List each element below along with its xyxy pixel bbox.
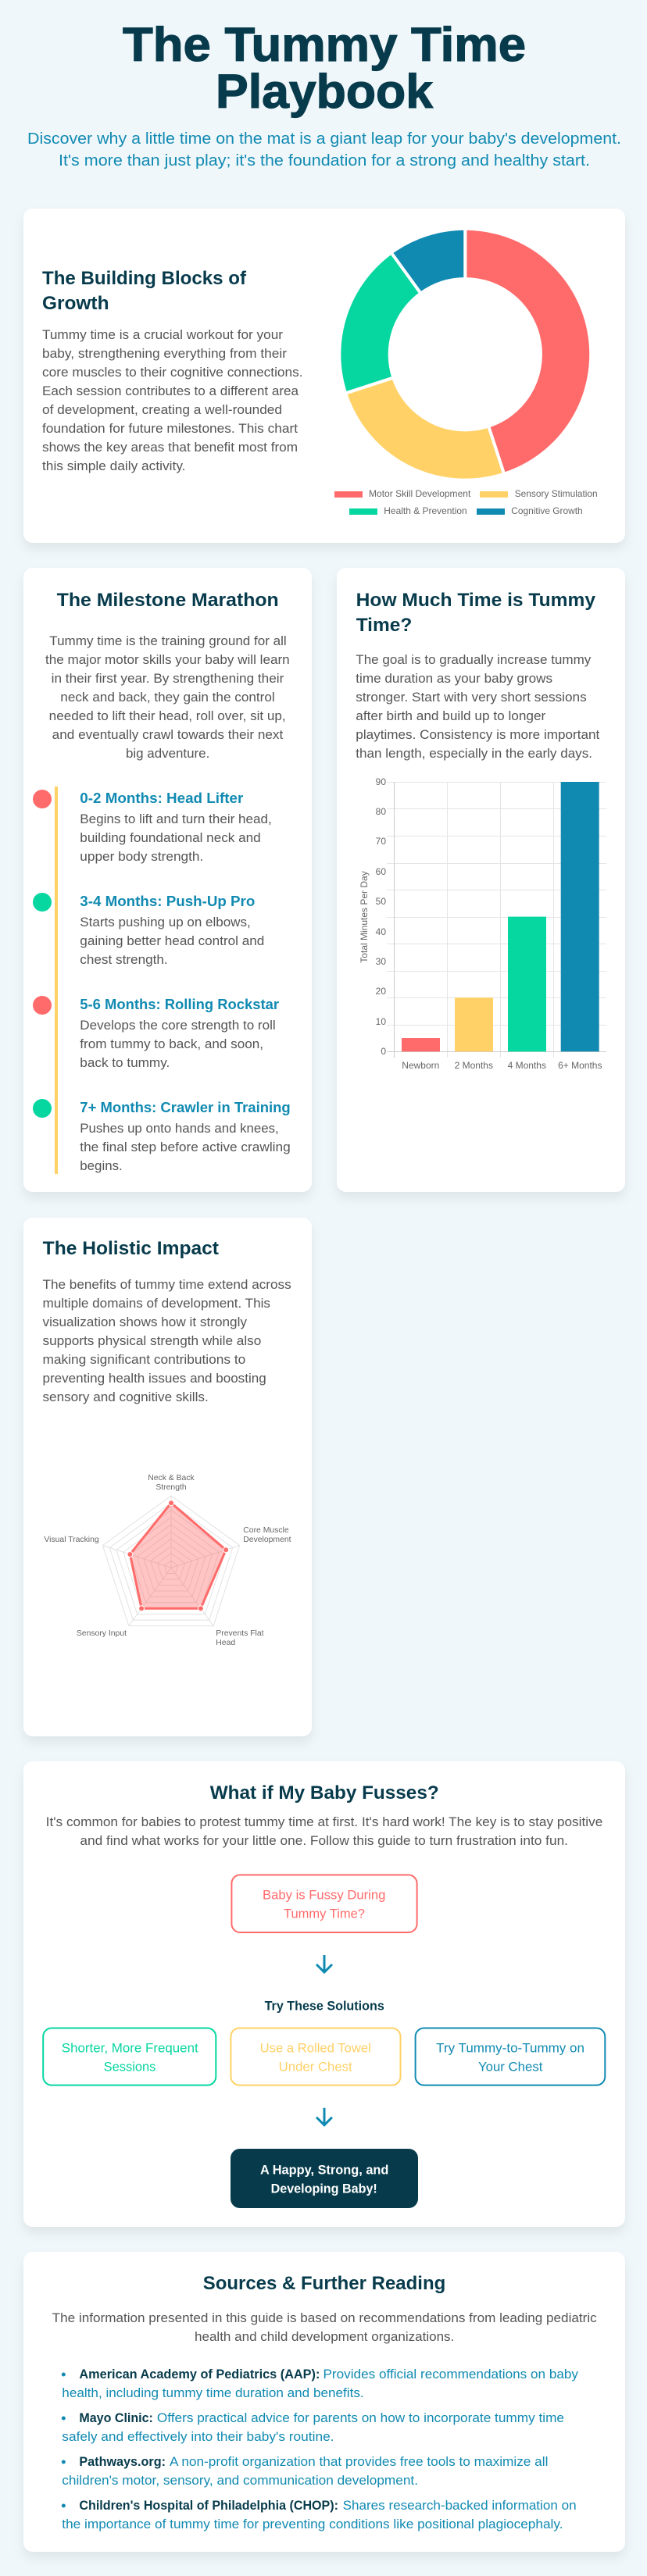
radar labels: Sensory Input [77,1629,127,1638]
milestone: 0-2 months: 0-2 Months: Head Lifter [80,790,243,806]
text block: time description: stronger. Start with very short sessions [356,690,587,705]
y axis labels: 30 [376,956,386,967]
text block: time description [356,653,600,761]
subtitle: It's more than just play; it's the foundation for a strong and healthy start. [59,152,590,169]
text block: time description: playtimes. Consistency is more important [356,728,600,742]
text block: building blocks description: foundation for future milestones. This chart [42,422,298,436]
timeline bar [55,787,58,1174]
source: Pathways.org [62,2455,548,2488]
y axis labels: 70 [376,836,386,847]
milestone: 3-4 months: Starts pushing up on elbows, [80,915,251,929]
source: CHOP: Shares research-backed information on [343,2499,577,2513]
page title [123,18,526,118]
flow box: tummy to tummy: Your Chest [478,2060,543,2075]
y axis labels: 40 [376,926,386,937]
y axis labels: 80 [376,806,386,817]
radar labels: Head [216,1639,235,1647]
donut legend: Motor Skill Development [369,488,471,499]
text block: holistic description: supports physical strength while also [42,1334,261,1348]
donut legend [334,488,598,516]
text block: holistic description: making significant contributions to [42,1353,245,1367]
text block: milestone description [45,634,290,761]
flow box: rolled towel: Under Chest [279,2060,352,2075]
milestone: 5-6 months [33,996,279,1070]
source: Mayo Clinic: Mayo Clinic: [79,2411,153,2425]
text block: building blocks description: core muscles to their cognitive connections. [42,366,303,380]
milestone: 5-6 months: back to tummy. [80,1056,170,1070]
text block: building blocks description: baby, strengthening everything from their [42,347,288,361]
source: Pathways.org: A non-profit organization that provides free tools to maximize all [170,2455,548,2469]
radar labels: Visual Tracking [44,1536,99,1544]
milestone: 0-2 months: upper body strength. [80,850,203,864]
text block: building blocks description [42,328,303,473]
text block: building blocks description: Tummy time is a crucial workout for your [42,328,284,342]
page title: Playbook [216,65,433,118]
radar labels: Prevents Flat [216,1629,264,1638]
text block: building blocks description: Each session contributes to a different area [42,384,299,398]
flow box: shorter sessions [43,2028,216,2085]
text block: time description: time duration as your baby grows [356,672,552,686]
milestone: 5-6 months: from tummy to back, and soon, [80,1037,263,1051]
y axis labels: 20 [376,986,386,997]
flow box: tummy to tummy: Try Tummy-to-Tummy on [436,2042,584,2056]
donut chart [339,229,591,480]
milestone: 7+ months: begins. [80,1159,123,1173]
y axis labels: 60 [376,866,386,877]
text block: fusses description: and find what works for your little one. Follow this guide to turn frustration into fun. [80,1834,568,1848]
heading: how much time: Time? [356,615,412,636]
text block: sources description: The information presented in this guide is based on recommendations from leading pediatric [52,2311,597,2325]
panel: sources [23,2252,625,2552]
panel: milestone marathon [23,568,312,1192]
bar chart [359,776,606,1071]
radar chart [44,1474,291,1647]
text block: milestone description: big adventure. [126,747,209,761]
milestone: 3-4 months: 3-4 Months: Push-Up Pro [80,893,255,909]
text block: sources description: health and child development organizations. [195,2330,454,2344]
subtitle [27,130,621,169]
flow box: happy baby outcome [231,2149,418,2208]
text block: holistic description: preventing health issues and boosting [42,1372,266,1386]
milestone: 3-4 months: chest strength. [80,953,168,967]
milestone: 5-6 months: 5-6 Months: Rolling Rockstar [80,996,279,1012]
heading: how much time [356,590,595,636]
text block: milestone description: and eventually crawl towards their next [52,728,284,742]
heading: building blocks: The Building Blocks of [42,268,247,289]
radar labels: Core Muscle [243,1526,289,1535]
heading: how much time: How Much Time is Tummy [356,590,595,611]
milestone: 0-2 months: Begins to lift and turn their head, [80,812,272,826]
x axis labels: 2 Months [455,1060,493,1071]
text block: milestone description: in their first year. By strengthening their [52,672,284,686]
x axis labels: 6+ Months [558,1060,602,1071]
flow box: baby is fussy [231,1875,417,1932]
text block: sources description [52,2311,597,2344]
flow box: shorter sessions: Sessions [104,2060,155,2075]
radar labels: Strength [155,1483,187,1492]
source: AAP: American Academy of Pediatrics (AAP): [79,2367,320,2382]
heading: sources: Sources & Further Reading [203,2273,445,2294]
heading: fusses: What if My Baby Fusses? [210,1782,439,1804]
donut legend: Health & Prevention [384,505,467,516]
y axis title: Total Minutes Per Day [359,871,370,963]
text block: fusses description: It's common for babies to protest tummy time at first. It's hard work! The key is to stay positive [46,1815,602,1829]
text block: holistic description: sensory and cognitive skills. [42,1390,209,1404]
milestone: 0-2 months [33,790,272,864]
text block: building blocks description: shows the key areas that benefit most from [42,441,298,455]
milestone: 7+ months: the final step before active crawling [80,1140,291,1154]
milestone: 3-4 months: gaining better head control and [80,934,264,948]
heading: building blocks: Growth [42,293,109,314]
source: Mayo Clinic: Offers practical advice for parents on how to incorporate tummy time [157,2411,564,2425]
source: CHOP [62,2499,577,2531]
panel: how much time [337,568,625,1192]
milestone: 7+ months: 7+ Months: Crawler in Training [80,1099,291,1115]
source: AAP: Provides official recommendations on baby [324,2367,579,2382]
y axis labels: 50 [376,896,386,907]
flow box: rolled towel: Use a Rolled Towel [260,2042,371,2056]
text block: building blocks description: this simple daily activity. [42,459,186,473]
radar labels: Development [243,1536,291,1544]
subheading: try these solutions: Try These Solutions [265,2000,384,2014]
flow box: happy baby outcome: A Happy, Strong, and [260,2164,388,2178]
flow box: tummy to tummy [416,2028,605,2085]
milestone: 0-2 months: building foundational neck and [80,831,261,845]
milestone: 5-6 months: Develops the core strength to roll [80,1019,276,1033]
source: Pathways.org: Pathways.org: [79,2455,166,2469]
source: Pathways.org: children's motor, sensory, and communication development. [62,2474,418,2488]
text block: milestone description: Tummy time is the training ground for all [49,634,287,648]
panel: what if my baby fusses [23,1761,625,2227]
text block: time description: The goal is to gradually increase tummy [356,653,592,667]
subtitle: Discover why a little time on the mat is a giant leap for your baby's development. [27,130,621,148]
flow box: baby is fussy: Baby is Fussy During [263,1889,385,1903]
page title: The Tummy Time [123,18,526,71]
x axis labels: Newborn [402,1060,439,1071]
text block: holistic description: visualization shows how it strongly [42,1315,248,1329]
text block: milestone description: neck and back, they gain the control [60,690,275,705]
panel: building blocks of growth [23,209,625,543]
y axis labels: 90 [376,776,386,787]
donut legend: Cognitive Growth [511,505,583,516]
source: AAP [62,2367,579,2400]
text block: milestone description: the major motor skills your baby will learn [45,653,290,667]
text block: time description: than length, especially in the early days. [356,747,592,761]
text block: holistic description: The benefits of tummy time extend across [42,1278,291,1292]
flow box: baby is fussy: Tummy Time? [284,1907,365,1921]
text block: milestone description: needed to lift their head, roll over, sit up, [49,709,286,723]
text block: building blocks description: of development, creating a well-rounded [42,403,282,417]
y axis labels [376,776,386,1057]
panel: holistic impact [23,1218,312,1736]
source: CHOP: Children's Hospital of Philadelphia (CHOP): [79,2499,338,2513]
arrow: to solutions [316,1955,332,1972]
source: AAP: health, including tummy time duration and benefits. [62,2386,364,2400]
flow box: rolled towel [231,2028,400,2085]
radar labels: Neck & Back [148,1474,195,1482]
y axis labels: 10 [376,1016,386,1027]
source: CHOP: the importance of tummy time for preventing conditions like positional plagiocephaly. [62,2517,563,2531]
heading: building blocks [42,268,247,314]
text block: time description: after birth and build up to longer [356,709,546,723]
arrow: to outcome [316,2108,332,2125]
donut legend: Sensory Stimulation [515,488,598,499]
text block: holistic description [42,1278,291,1404]
heading: holistic impact: The Holistic Impact [43,1238,219,1259]
x axis labels: 4 Months [508,1060,546,1071]
flow box: shorter sessions: Shorter, More Frequent [62,2042,198,2056]
radar labels [44,1474,291,1647]
x axis labels [402,1060,602,1071]
source: Mayo Clinic [62,2411,564,2444]
heading: milestone marathon: The Milestone Marathon [57,590,279,611]
text block: fusses description [46,1815,602,1848]
milestone: 7+ months: Pushes up onto hands and knees, [80,1122,279,1136]
milestone: 3-4 months [33,893,264,967]
text block: holistic description: multiple domains of development. This [42,1297,270,1311]
flow box: happy baby outcome: Developing Baby! [271,2182,377,2196]
y axis labels: 0 [381,1046,386,1057]
source: Mayo Clinic: safely and effectively into their baby's routine. [62,2430,334,2444]
milestone: 7+ months [33,1099,291,1173]
